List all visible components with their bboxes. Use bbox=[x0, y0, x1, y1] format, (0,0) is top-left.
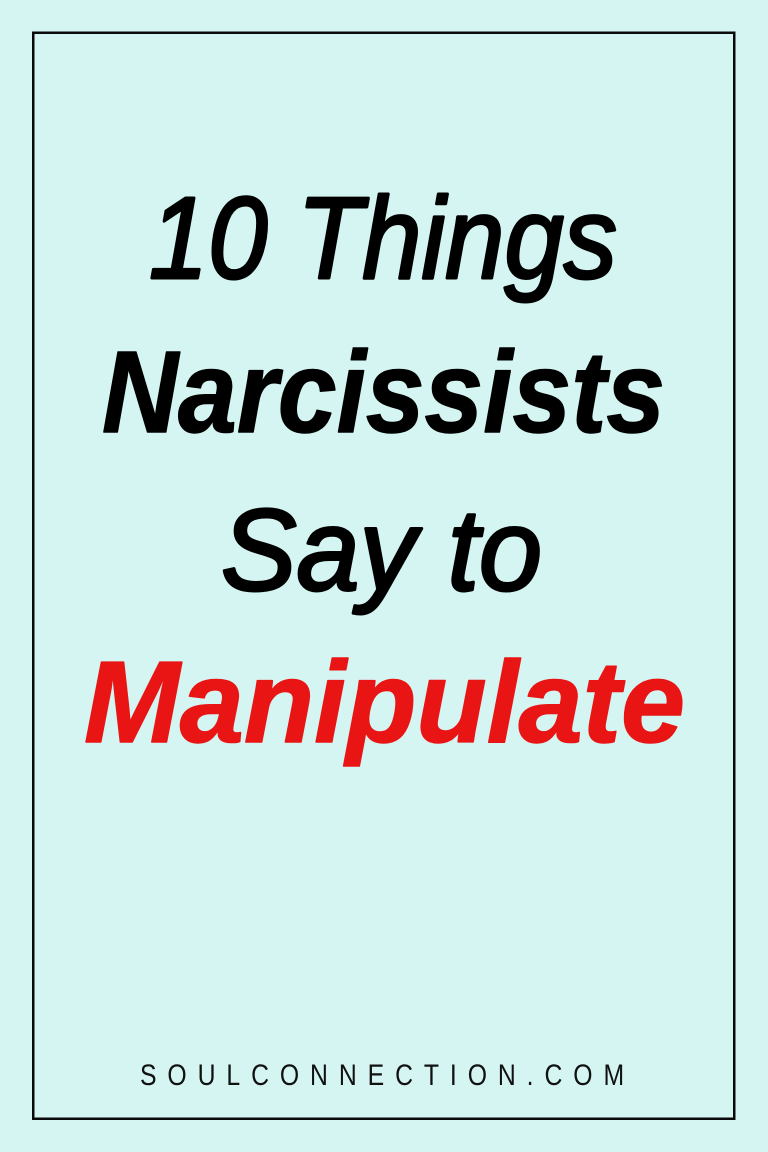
website footer: SOULCONNECTION.COM bbox=[140, 1059, 635, 1092]
title line: Narcissists: Narcissists bbox=[102, 327, 665, 457]
title line: 10 Things: 10 Things bbox=[149, 173, 617, 303]
title line: Say to: Say to bbox=[221, 485, 542, 615]
title bbox=[84, 173, 685, 767]
title line: Manipulate: Manipulate bbox=[84, 637, 685, 767]
